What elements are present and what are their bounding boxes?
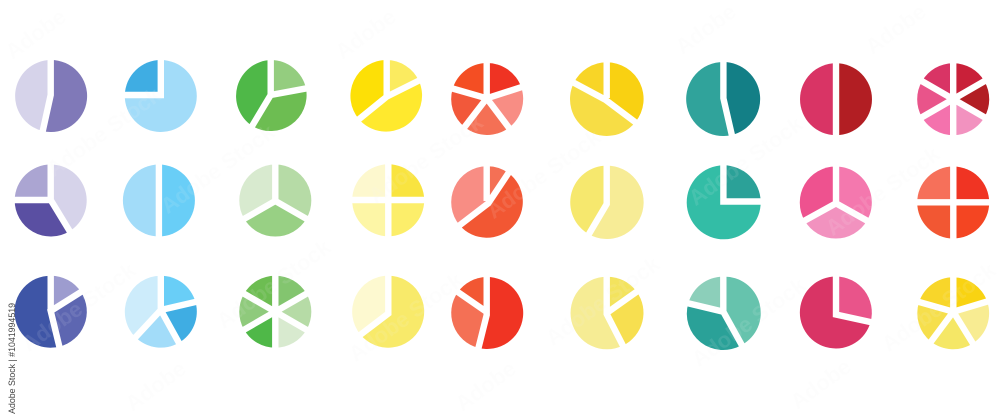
pie: teal quarter [687,163,763,239]
pie: sky blue four slices [125,274,198,348]
pie: violet three slices [13,162,87,237]
pie: blue quarter [123,58,197,132]
pie: red three slices [451,275,523,350]
pie: dark teal two slices [686,60,760,137]
pie: sea green three slices [686,275,761,350]
watermarks: Adobe Stock [212,234,336,334]
watermarks: Adobe [1,4,71,64]
pie: soft yellow two slices [570,164,644,239]
pie: red five slices [451,61,523,135]
pie: yellow three slices [350,58,422,132]
pie: crimson and pink six slices [917,61,989,137]
watermarks: Adobe Stock [684,111,808,211]
watermarks: Adobe Stock [42,82,166,182]
watermarks: Adobe Stock [344,267,468,367]
pie: straw yellow three slices [571,275,643,349]
pie: light blue half [123,163,195,238]
watermarks: Adobe [331,4,401,64]
pie: golden five slices [917,275,989,349]
pie: orange red quarters [915,164,991,240]
pie: navy three slices [14,274,87,348]
watermarks: Adobe Stock [541,251,665,351]
pie: pale green three slices [239,163,311,237]
pie: purple two slices [15,58,87,133]
watermarks: Adobe Stock [156,119,280,219]
watermarks: Adobe [121,356,191,416]
pie: lemon two slices [352,274,424,348]
watermarks: Adobe Stock [17,257,141,357]
watermarks: Adobe Stock [364,109,488,209]
pie: green three slices [236,58,308,131]
pie: amber three slices [570,60,644,136]
watermarks: Adobe Stock [877,257,1000,357]
watermarks: Adobe Stock [482,124,606,224]
watermarks: Adobe [861,0,931,59]
pie: green six slices [239,274,311,349]
stock image id caption: Adobe Stock | #1041994519 [7,303,17,414]
pie: crimson half [800,61,872,137]
watermarks: Adobe Stock [687,272,811,372]
pie: coral three slices [451,164,523,238]
watermarks: Adobe [451,356,521,416]
pie: crimson two slices [800,274,872,348]
watermarks: Adobe [671,0,741,59]
watermarks: Adobe [786,354,856,414]
pie: pale yellow quarters [350,162,426,238]
watermarks: Adobe Stock [821,141,945,241]
pie: pink three slices [800,164,872,239]
